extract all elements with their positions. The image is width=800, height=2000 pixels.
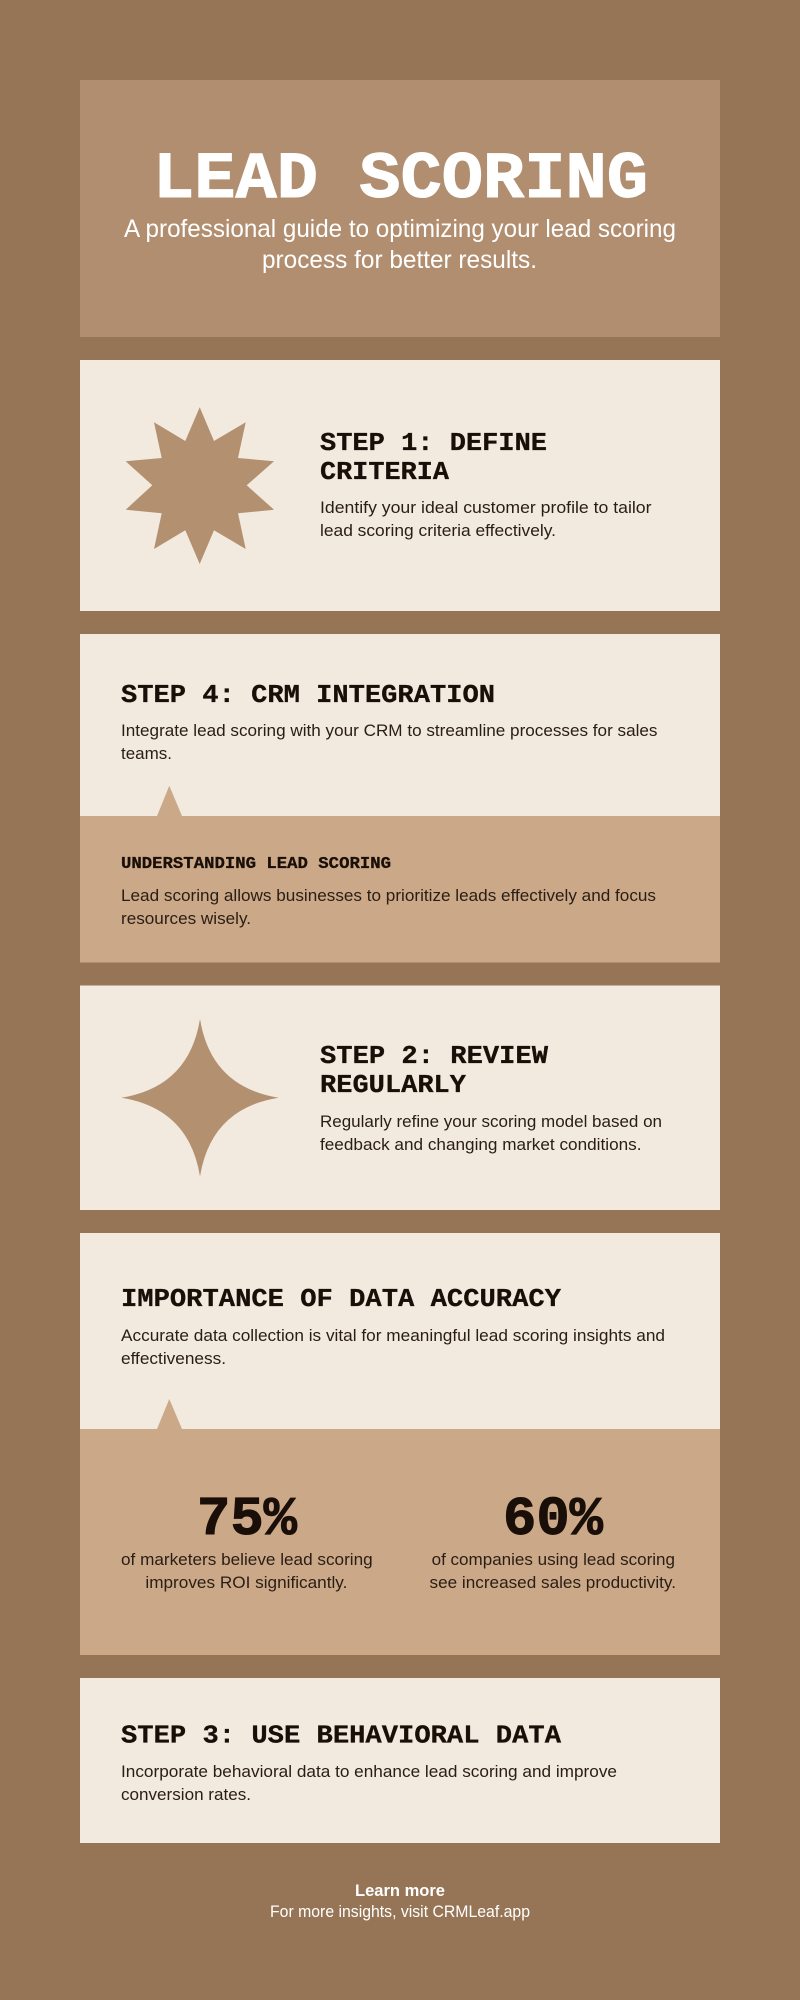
stat: 75%: of marketers believe lead scoring bbox=[121, 1550, 373, 1569]
subtitle: process for better results. bbox=[262, 246, 537, 274]
stats band bbox=[80, 1399, 720, 1655]
panel: step 4 bbox=[80, 634, 720, 962]
heading: step 1: STEP 1: DEFINE bbox=[320, 428, 547, 458]
heading: step 2: REGULARLY bbox=[320, 1070, 466, 1100]
footer: Learn more bbox=[355, 1881, 445, 1900]
footer: For more insights, visit CRMLeaf.app bbox=[270, 1902, 530, 1921]
stat: 60%: see increased sales productivity. bbox=[430, 1573, 676, 1592]
icon: four-point star bbox=[122, 1019, 278, 1176]
text: data accuracy body bbox=[121, 1326, 665, 1368]
panel: step 1 bbox=[80, 360, 720, 611]
text: step 4 body: Integrate lead scoring with your CRM to streamline processes for sales bbox=[121, 721, 658, 740]
stat: 60% bbox=[430, 1488, 676, 1592]
callout text: resources wisely. bbox=[121, 909, 251, 928]
heading: step 1: CRITERIA bbox=[320, 457, 449, 487]
icon: ten-point star bbox=[126, 407, 274, 564]
stat: 60%: 60% bbox=[503, 1488, 604, 1551]
stat: 60%: of companies using lead scoring bbox=[432, 1550, 675, 1569]
text: data accuracy body: Accurate data collection is vital for meaningful lead scoring insights and bbox=[121, 1326, 665, 1345]
heading: data accuracy: IMPORTANCE OF DATA ACCURACY bbox=[121, 1284, 561, 1314]
subtitle bbox=[124, 215, 676, 274]
callout: understanding lead scoring bbox=[80, 786, 720, 962]
text: step 1 body: lead scoring criteria effectively. bbox=[320, 521, 556, 540]
heading: step 4: STEP 4: CRM INTEGRATION bbox=[121, 680, 495, 710]
text: step 1 body bbox=[320, 498, 652, 540]
heading: step 2: STEP 2: REVIEW bbox=[320, 1041, 548, 1071]
panel: header bbox=[80, 80, 720, 337]
panel: step 3 bbox=[80, 1678, 720, 1843]
text: data accuracy body: effectiveness. bbox=[121, 1349, 226, 1368]
panel: importance of data accuracy bbox=[80, 1233, 720, 1655]
heading: step 2 bbox=[320, 1041, 548, 1100]
text: step 4 body: teams. bbox=[121, 744, 172, 763]
text: step 1 body: Identify your ideal customer profile to tailor bbox=[320, 498, 652, 517]
text: step 4 body bbox=[121, 721, 658, 763]
footer bbox=[270, 1881, 530, 1921]
title: LEAD SCORING bbox=[153, 142, 648, 217]
subtitle: A professional guide to optimizing your lead scoring bbox=[124, 215, 676, 243]
text: step 3 body: conversion rates. bbox=[121, 1785, 251, 1804]
text: step 2 body: feedback and changing market conditions. bbox=[320, 1135, 642, 1154]
text: step 2 body bbox=[320, 1112, 662, 1154]
callout text bbox=[121, 886, 656, 928]
heading: step 1 bbox=[320, 428, 547, 487]
stat: 75% bbox=[121, 1488, 373, 1592]
stat: 75%: 75% bbox=[197, 1488, 298, 1551]
subheading: UNDERSTANDING LEAD SCORING bbox=[121, 855, 391, 874]
text: step 3 body: Incorporate behavioral data to enhance lead scoring and improve bbox=[121, 1762, 617, 1781]
callout text: Lead scoring allows businesses to prioritize leads effectively and focus bbox=[121, 886, 656, 905]
text: step 3 body bbox=[121, 1762, 617, 1804]
text: step 2 body: Regularly refine your scoring model based on bbox=[320, 1112, 662, 1131]
stat: 75%: improves ROI significantly. bbox=[145, 1573, 347, 1592]
panel: step 2 bbox=[80, 986, 720, 1210]
heading: step 3: STEP 3: USE BEHAVIORAL DATA bbox=[121, 1720, 561, 1750]
